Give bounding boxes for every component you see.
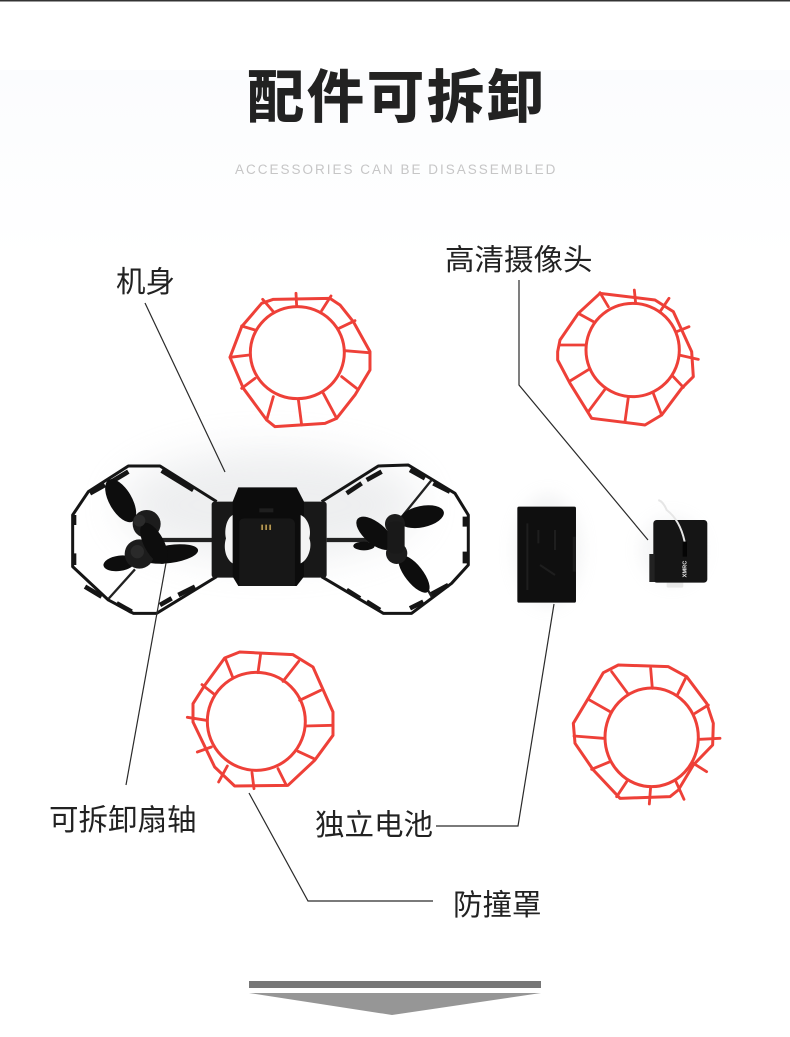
bottom arrow bbox=[249, 981, 541, 1015]
battery bbox=[517, 507, 576, 603]
label: camera: 高清摄像头 bbox=[445, 244, 593, 277]
label: propeller shaft: 可拆卸扇轴 bbox=[49, 804, 197, 837]
camera module bbox=[649, 500, 707, 588]
center body bbox=[212, 487, 327, 586]
label: battery: 独立电池 bbox=[315, 809, 433, 842]
leader line: body bbox=[145, 303, 225, 472]
leader line: battery bbox=[436, 604, 554, 826]
protective guard: top left bbox=[230, 293, 370, 427]
protective guard: bottom left bbox=[187, 652, 333, 789]
drone body with cages and propellers bbox=[73, 465, 468, 613]
leader line: camera bbox=[519, 280, 648, 540]
subtitle: ACCESSORIES CAN BE DISASSEMBLED bbox=[235, 162, 557, 177]
title: 配件可拆卸 bbox=[247, 66, 547, 130]
left cage bbox=[73, 466, 217, 613]
label: guard: 防撞罩 bbox=[453, 889, 542, 922]
left propellers bbox=[99, 474, 199, 573]
right cage bbox=[322, 465, 468, 613]
right propellers bbox=[351, 502, 446, 597]
leader line: propeller shaft bbox=[126, 563, 166, 785]
leader line: guard bbox=[249, 793, 433, 901]
label: body: 机身 bbox=[116, 266, 175, 299]
camera module: XMRC bbox=[682, 561, 688, 577]
protective guard: top right bbox=[558, 290, 698, 425]
protective guard: bottom right bbox=[573, 665, 720, 804]
